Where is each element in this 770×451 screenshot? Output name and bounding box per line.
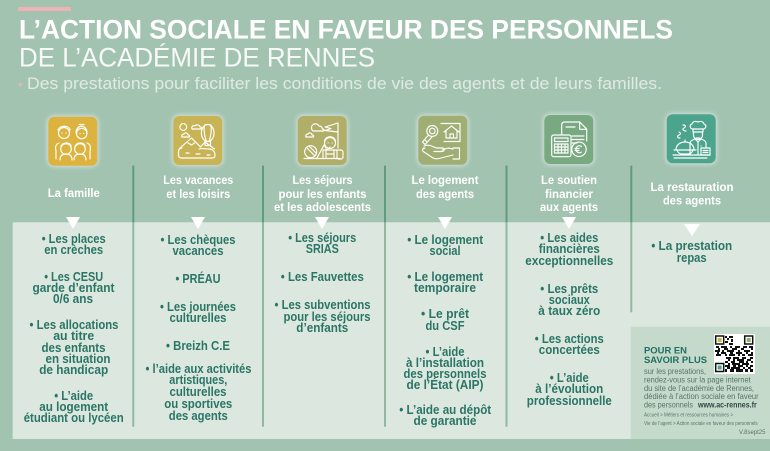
list: soutien financier: à l’évolution (535, 382, 603, 396)
list: logement (399, 233, 492, 428)
text: information: rendez-vous sur la page internet (644, 376, 751, 384)
list: la famille: • Les CESU (44, 270, 103, 284)
heading: logement: des agents (416, 189, 474, 201)
list: séjours: SRIAS (306, 242, 339, 256)
heading: soutien financier: Le soutien (541, 175, 597, 187)
list: logement: social (430, 244, 460, 258)
arrow (315, 217, 329, 229)
heading: pour en savoir plus: POUR EN (644, 346, 687, 357)
list: restauration: repas (677, 251, 707, 265)
list: soutien financier: professionnelle (527, 394, 612, 408)
list: la famille: au logement (39, 400, 109, 414)
list: logement: à l’installation (406, 356, 484, 370)
arrow (191, 217, 205, 229)
list: la famille: • L’aide (54, 389, 93, 403)
list: la famille: en situation (46, 352, 110, 366)
list: vacances et loisirs: culturelles (170, 385, 227, 399)
text: breadcrumb: Accueil > Métiers et ressources humaines > (644, 413, 733, 419)
text: version: V.8sept25 (739, 429, 766, 436)
list: la famille: • Les places (42, 232, 106, 246)
column: séjours (274, 115, 371, 335)
heading: pour en savoir plus: SAVOIR PLUS (644, 355, 707, 366)
column: logement (399, 115, 492, 428)
list: vacances et loisirs: • Les journées (160, 300, 236, 314)
text: information (644, 367, 759, 410)
list: la famille: 0/6 ans (53, 292, 93, 306)
text: breadcrumb (644, 413, 758, 427)
list: logement: des personnels (404, 367, 487, 381)
column: soutien financier (525, 114, 613, 408)
heading: restauration: La restauration (650, 182, 734, 194)
list: logement: • Le prêt (421, 307, 470, 321)
list: la famille: en crèches (44, 243, 103, 257)
icon: catering (666, 113, 717, 164)
heading: soutien financier (540, 175, 598, 214)
list: la famille: • Les allocations (30, 318, 119, 332)
column: la famille (24, 116, 124, 425)
heading: soutien financier: financier (545, 189, 594, 201)
title: L’ACTION SOCIALE EN FAVEUR DES PERSONNELS (19, 14, 673, 44)
heading: restauration: des agents (663, 196, 721, 208)
heading: séjours: pour les enfants (278, 189, 366, 201)
list: vacances et loisirs: • Breizh C.E (166, 339, 230, 353)
heading: vacances et loisirs: et les loisirs (166, 189, 230, 201)
arrow (438, 217, 452, 229)
heading: vacances et loisirs: Les vacances (163, 175, 233, 187)
icon: holidays (172, 115, 223, 166)
list: vacances et loisirs: des agents (169, 409, 228, 423)
list: soutien financier: exceptionnelles (525, 254, 613, 268)
list: logement: • L’aide au dépôt (399, 403, 492, 417)
title: DE L’ACADÉMIE DE RENNES (19, 43, 375, 73)
list: logement: • Le logement (407, 233, 484, 247)
heading: la famille: La famille (48, 188, 100, 200)
list: soutien financier: sociaux (549, 293, 590, 307)
list: logement: • Le logement (407, 270, 484, 284)
list: logement: temporaire (414, 281, 476, 295)
arrow (684, 224, 700, 236)
text: information: du site de l’académie de Rennes, (644, 384, 754, 393)
accent bar (18, 7, 71, 11)
heading: logement (412, 175, 479, 201)
heading: pour en savoir plus (644, 346, 707, 366)
list: soutien financier: • L’aide (550, 371, 589, 385)
list: vacances et loisirs (146, 233, 252, 423)
title (19, 14, 673, 73)
text: information: sur les prestations, (644, 367, 706, 376)
list: vacances et loisirs: ou sportives (164, 397, 232, 411)
list: la famille (24, 232, 124, 425)
icon: family (47, 116, 98, 167)
text: information: dédiée à l’action sociale en faveur (644, 392, 759, 401)
list: la famille: garde d’enfant (32, 281, 115, 295)
heading: séjours: Les séjours (292, 175, 352, 187)
list: séjours (274, 231, 371, 335)
heading: séjours: et les adolescents (274, 202, 371, 214)
list: soutien financier: à taux zéro (538, 304, 601, 318)
list: vacances et loisirs: • l’aide aux activités (146, 362, 252, 376)
panel: content background (13, 222, 770, 439)
list: vacances et loisirs: • PRÉAU (176, 271, 220, 286)
qr finder squares (716, 336, 753, 372)
heading: soutien financier: aux agents (540, 202, 598, 214)
column: restauration (650, 113, 734, 265)
text: information: des personnels (644, 401, 693, 410)
list: logement: du CSF (426, 319, 465, 333)
list: logement: de l’État (AIP) (406, 377, 484, 392)
list: restauration (651, 239, 732, 265)
column dividers (132, 166, 632, 427)
list: restauration: • La prestation (651, 239, 732, 253)
icon: financial support (543, 114, 594, 165)
list: vacances et loisirs: culturelles (170, 311, 227, 325)
list: soutien financier: financières (539, 242, 600, 256)
list: séjours: • Les séjours (288, 231, 356, 245)
arrow (562, 217, 576, 229)
heading: séjours (274, 175, 371, 214)
list: séjours: pour les séjours (284, 310, 371, 324)
list: soutien financier: • Les prêts (540, 282, 598, 296)
column: vacances et loisirs (146, 115, 252, 423)
panel: pour en savoir plus (631, 327, 770, 439)
heading: logement: Le logement (412, 175, 479, 187)
list: vacances et loisirs: vacances (172, 244, 224, 258)
list: séjours: • Les Fauvettes (281, 270, 364, 284)
icon: housing (417, 115, 468, 166)
qr code (714, 334, 755, 374)
list: vacances et loisirs: • Les chèques (160, 233, 236, 247)
heading: restauration (650, 182, 734, 208)
arrow (66, 217, 80, 229)
list: vacances et loisirs: artistiques, (169, 373, 227, 387)
text: information: www.ac-rennes.fr (697, 401, 757, 410)
list: la famille: des enfants (42, 341, 106, 355)
list: séjours: d’enfants (296, 321, 348, 335)
list: logement: • L’aide (426, 345, 465, 359)
list: soutien financier: • Les aides (540, 231, 598, 245)
list: la famille: étudiant ou lycéen (24, 411, 124, 425)
list: la famille: de handicap (39, 363, 109, 377)
list: la famille: au titre (53, 329, 94, 343)
list: soutien financier: concertées (539, 343, 600, 357)
subtitle: Des prestations pour faciliter les conditions de vie des agents et de leurs familles. (27, 74, 662, 93)
list: soutien financier: • Les actions (535, 332, 604, 346)
heading: vacances et loisirs (163, 175, 233, 201)
list: séjours: • Les subventions (274, 298, 371, 312)
list: logement: de garantie (414, 414, 477, 428)
icon: children's stays (297, 115, 348, 166)
list: soutien financier (525, 231, 613, 408)
